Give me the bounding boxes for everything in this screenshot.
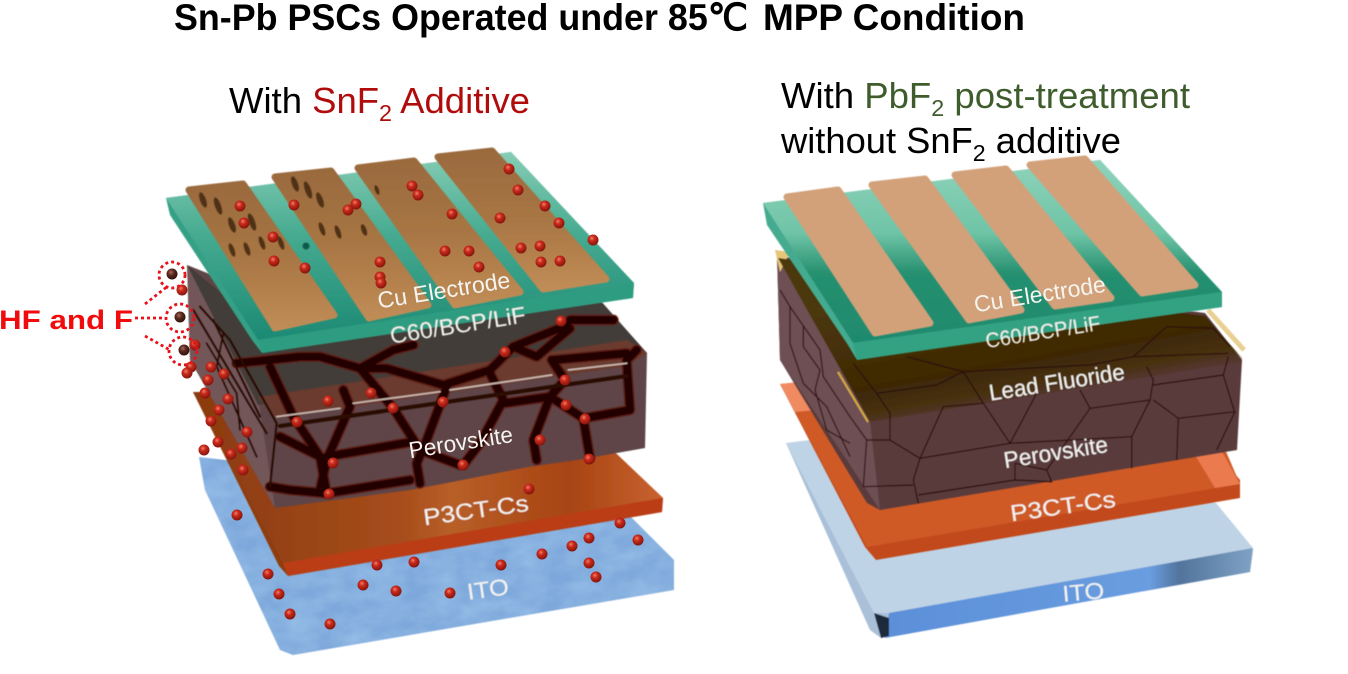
layer: perovskite and lead fluoride (right)	[775, 250, 1244, 510]
layer: ITO (right)	[786, 440, 1253, 638]
label: Cu Electrode (left): Cu Electrode	[376, 267, 512, 313]
layer: Cu electrode strips (right)	[787, 159, 1195, 333]
heading: with PbF2 post-treatment without SnF2 additive: With PbF	[781, 75, 930, 116]
diagram: stable stack with PbF2 post-treatment	[763, 159, 1253, 638]
layer: perovskite and lead fluoride (right): Perovskite	[1002, 431, 1110, 473]
corrosion marks on electrodes	[197, 175, 381, 257]
layer: P3CT-Cs (left)	[193, 392, 663, 576]
heading: with PbF2 post-treatment without SnF2 additive: 2	[931, 95, 944, 121]
heading: with SnF2 additive: With SnF	[229, 80, 378, 121]
label: Cu Electrode (right): Cu Electrode	[972, 271, 1107, 317]
heading: with PbF2 post-treatment without SnF2 additive: additive	[986, 120, 1121, 161]
layer: perovskite with cracks (left)	[187, 265, 647, 508]
layer: P3CT-Cs (right): P3CT-Cs	[1009, 486, 1117, 526]
cracks	[193, 307, 637, 493]
heading: with PbF2 post-treatment without SnF2 additive: post-treatment	[944, 75, 1190, 116]
heading: with PbF2 post-treatment without SnF2 additive	[780, 75, 1190, 166]
label: Perovskite (left): Perovskite	[407, 421, 515, 463]
heading: with SnF2 additive: Additive	[392, 80, 530, 121]
layer: C60/BCP/LiF (left): C60/BCP/LiF	[388, 302, 527, 349]
layer: corroded Cu electrode strips (left)	[189, 151, 606, 328]
layer: P3CT-Cs (right)	[780, 382, 1240, 560]
layer: ITO (left): ITO	[465, 573, 510, 605]
callout: HF and F with dotted circles	[0, 262, 197, 365]
layer: C60/BCP/LiF (right): C60/BCP/LiF	[984, 312, 1102, 353]
heading: with PbF2 post-treatment without SnF2 additive: 2	[973, 140, 986, 166]
diagram: degraded stack with SnF2 additive	[166, 151, 674, 655]
layer: C60/BCP/LiF (right)	[763, 160, 1222, 360]
layer: ITO (right): ITO	[1061, 577, 1105, 607]
grain boundaries	[780, 290, 1235, 503]
layer: perovskite and lead fluoride (right): Lead Fluoride	[987, 359, 1126, 406]
heading: with SnF2 additive: 2	[379, 100, 392, 126]
layer: C60/BCP/LiF (left)	[166, 152, 634, 353]
particles: migrating HF and F ions	[176, 164, 644, 630]
callout: HF and F with dotted circles: HF and F	[0, 305, 133, 335]
title	[174, 0, 1025, 38]
layer: P3CT-Cs (left): P3CT-Cs	[422, 490, 530, 530]
layer: ITO (left)	[199, 457, 674, 655]
heading: with PbF2 post-treatment without SnF2 additive: without SnF	[781, 120, 971, 161]
